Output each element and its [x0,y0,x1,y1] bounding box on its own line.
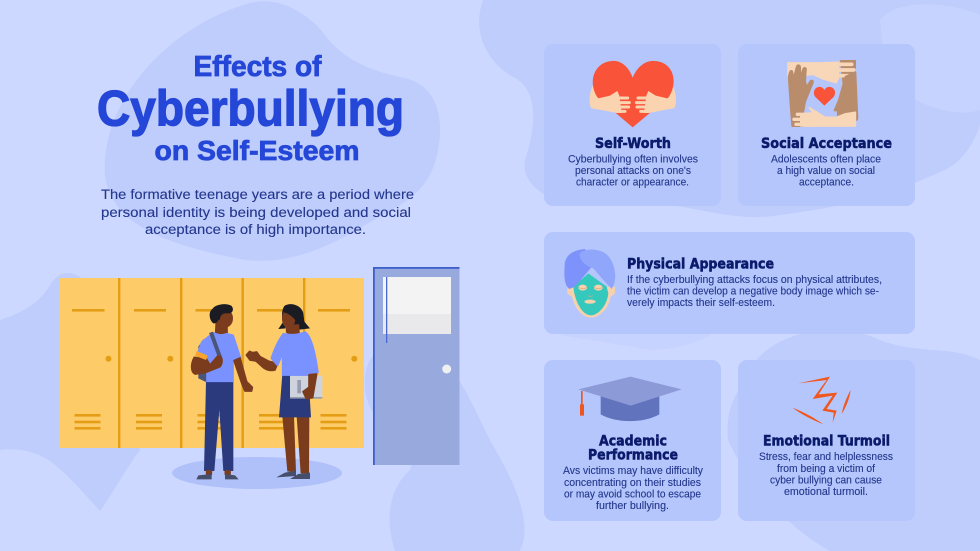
body text [568,154,699,188]
body text: If the cyberbullying attacks focus on physical attributes, [627,274,882,286]
body text: Cyberbullying often involves [568,154,699,166]
title: Cyberbullying [97,80,404,136]
heading: Emotional Turmoil [763,434,890,450]
body text: character or appearance. [576,176,689,188]
body text [563,465,704,512]
heading [588,434,678,463]
icon: lightning sparks [792,377,851,424]
heading: Physical Appearance [627,256,774,272]
intro paragraph: The formative teenage years are a period where [101,187,414,203]
body text [759,451,894,498]
intro paragraph [101,187,414,238]
body text: concentrating on their studies [564,477,702,489]
body text: Avs victims may have difficulty [563,465,704,477]
illustration: door [373,267,460,465]
title: on Self-Esteem [154,135,360,166]
panel: Physical Appearance [544,232,915,334]
heading: Academic [599,434,667,450]
body text: or may avoid school to escape [564,488,701,500]
body text: acceptance. [799,176,854,188]
body text [627,274,882,309]
icon: four hands around heart [788,60,857,127]
heading: Performance [588,447,678,463]
body text: the victim can develop a negative body image which se- [627,286,879,298]
intro paragraph: acceptance is of high importance. [145,222,366,238]
icon: face mask with towel [564,249,615,318]
panel: Academic Performance [544,360,721,521]
illustration: boy with backpack [192,304,252,479]
body text: cyber bullying can cause [770,474,882,486]
body text [771,154,881,188]
intro paragraph: personal identity is being developed and social [101,205,411,221]
body text: further bullying. [596,500,669,512]
panel: Emotional Turmoil [738,360,915,521]
body text: verely impacts their self-esteem. [627,297,775,309]
illustration: lockers [59,278,364,448]
heading: Self-Worth [595,136,671,152]
panel: Social Acceptance [738,44,915,206]
title: Effects of [194,51,322,83]
heading: Social Acceptance [761,136,892,152]
illustration: girl with notebook [246,304,322,479]
body text: from being a victim of [777,463,876,475]
icon: hands holding heart [590,61,676,127]
body text: personal attacks on one's [575,165,692,177]
body text: emotional turmoil. [784,486,868,498]
floor shadow [172,457,342,489]
title [97,51,404,166]
body text: Adolescents often place [771,154,881,166]
body text: a high value on social [777,165,875,177]
icon: graduation cap [578,377,682,421]
panel: Self-Worth [544,44,721,206]
body text: Stress, fear and helplessness [759,451,894,463]
